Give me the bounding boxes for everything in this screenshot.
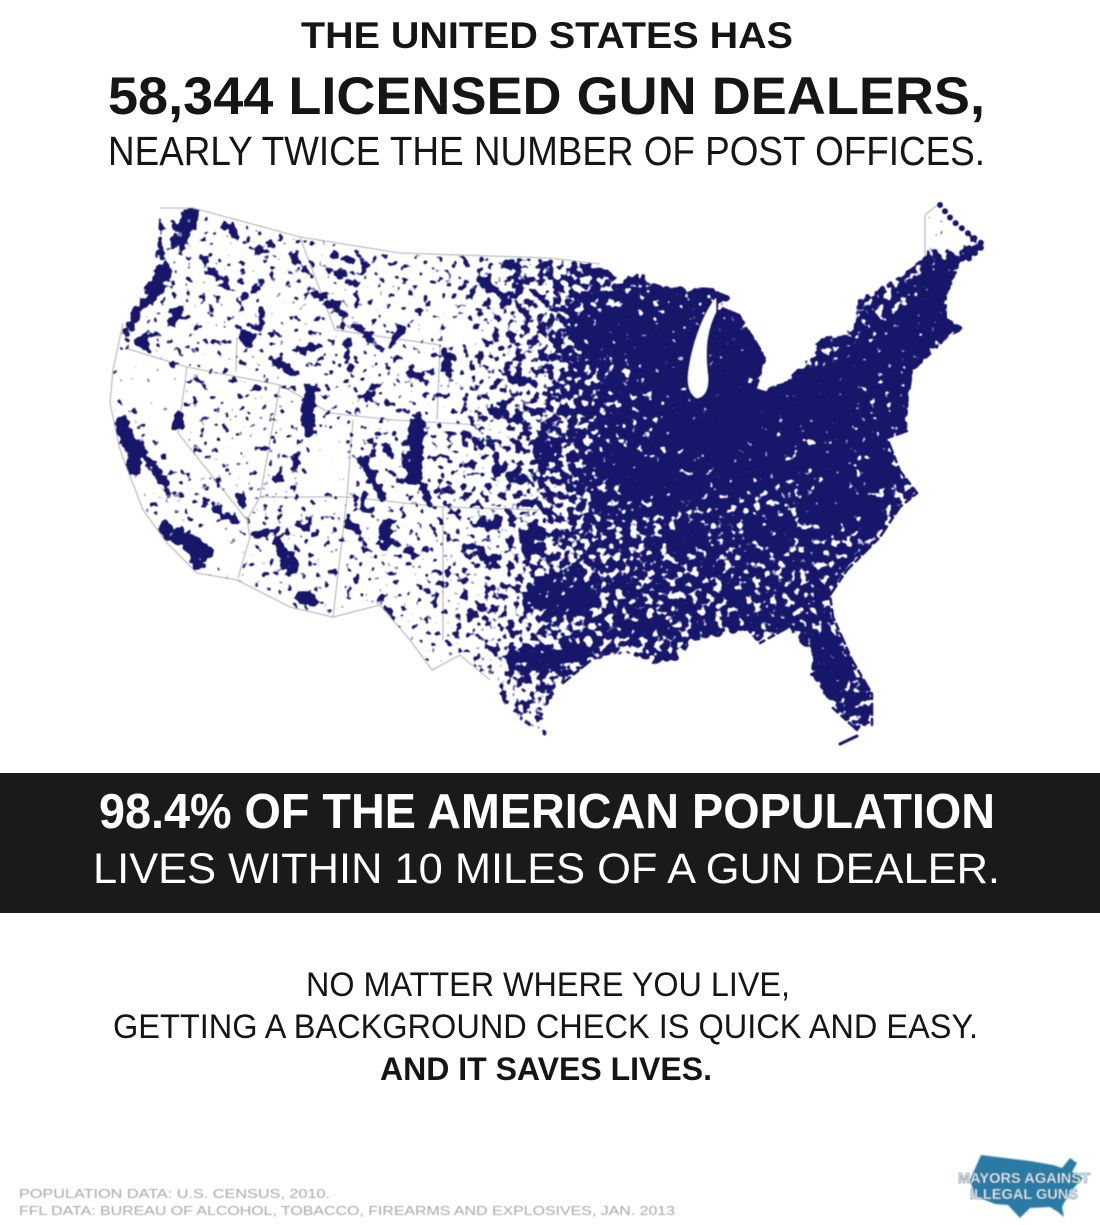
dealer source: FFL DATA: BUREAU OF ALCOHOL, TOBACCO, FIREARMS AND EXPLOSIVES, JAN. 2013 [19, 1204, 675, 1218]
message line 1: NO MATTER WHERE YOU LIVE, [306, 966, 790, 1004]
banner subline: LIVES WITHIN 10 MILES OF A GUN DEALER. [93, 845, 1000, 893]
logo wordmark: ILLEGAL GUNS [970, 1187, 1078, 1203]
message line 2: GETTING A BACKGROUND CHECK IS QUICK AND EASY. [113, 1008, 978, 1046]
logo wordmark: MAYORS AGAINST [958, 1171, 1090, 1187]
metro concentrations in the east [507, 251, 950, 693]
map of US gun dealers [90, 190, 1010, 760]
stippled dealer density field [112, 208, 980, 736]
Lake Michigan [688, 298, 716, 398]
title block [108, 15, 985, 174]
population source: POPULATION DATA: U.S. CENSUS, 2010. [19, 1187, 330, 1201]
title line 2: dealer count: 58,344 LICENSED GUN DEALERS, [108, 67, 985, 126]
US outline and state borders [110, 203, 940, 680]
title line 3: NEARLY TWICE THE NUMBER OF POST OFFICES. [108, 128, 985, 174]
Florida Keys [840, 736, 857, 744]
logo wordmark [958, 1171, 1090, 1203]
western streaky corridors [125, 225, 525, 622]
closing message [113, 966, 978, 1087]
logo US silhouette [970, 1155, 1083, 1218]
western major metro clusters [122, 212, 447, 600]
logo: Mayors Against Illegal Guns [958, 1155, 1090, 1218]
banner headline: 98.4% OF THE AMERICAN POPULATION [99, 785, 995, 839]
core dense belt: upper midwest to northeast [540, 250, 955, 520]
base density, rising from west to east [112, 208, 980, 736]
dark eastern and gulf coastline [563, 431, 917, 730]
dark statistics banner [0, 773, 1100, 913]
Maine coastline dealers [940, 205, 984, 262]
source notes [19, 1187, 675, 1218]
title line 1: THE UNITED STATES HAS [301, 15, 793, 56]
message line 3: AND IT SAVES LIVES. [380, 1051, 712, 1087]
